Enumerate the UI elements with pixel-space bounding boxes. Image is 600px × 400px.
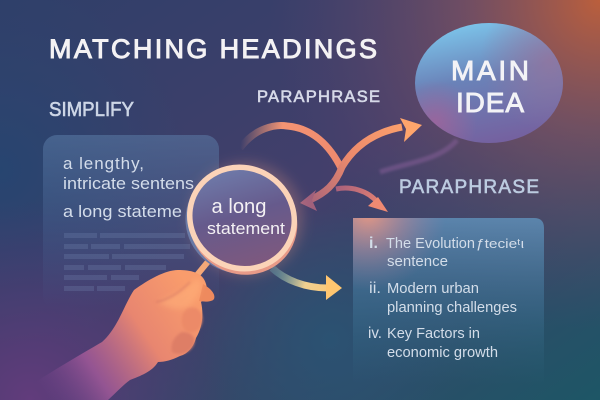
faint arrow trail from main idea xyxy=(380,140,457,172)
handle xyxy=(197,258,211,275)
main idea ellipse xyxy=(415,23,563,143)
list text: planning challenges xyxy=(387,299,517,316)
list text: economic growth xyxy=(387,344,498,361)
list text: Key Factors in xyxy=(387,325,480,342)
main idea label: IDEA xyxy=(456,87,524,118)
list text: The Evolution xyxy=(386,235,475,252)
source text lines: a lengthy, xyxy=(63,154,144,173)
heading: simplify: SIMPLIFY xyxy=(49,99,134,121)
placeholder text lines xyxy=(64,233,190,291)
lens body xyxy=(166,149,312,293)
palm crease xyxy=(156,282,190,302)
list text: ƒtecieᵗι xyxy=(476,236,524,251)
heading: paraphrase bottom: PARAPHRASE xyxy=(399,177,539,198)
list text: sentence xyxy=(387,253,448,270)
thumb highlight xyxy=(158,278,201,309)
curled fingers xyxy=(182,307,202,332)
source text lines: a long stateme xyxy=(63,202,182,221)
lens text: a long xyxy=(212,196,266,218)
list text: Modern urban xyxy=(387,280,479,297)
arrow: lens to list panel xyxy=(272,268,342,300)
title: MATCHING HEADINGS xyxy=(49,34,377,64)
lens text xyxy=(207,196,285,238)
lens ring xyxy=(171,148,313,288)
list text: i. xyxy=(369,235,378,252)
source text lines: intricate sentens xyxy=(63,174,194,193)
list text: iv. xyxy=(368,325,382,342)
panel: source text xyxy=(43,135,219,310)
panel: headings list xyxy=(353,218,544,385)
arrow: up to main idea and back to lens xyxy=(300,118,422,211)
magnifier xyxy=(166,148,317,295)
arrow: curved from lens over the top xyxy=(240,126,342,170)
arrow: to list panel xyxy=(336,188,388,212)
lens glow xyxy=(189,162,303,276)
source text lines xyxy=(63,154,194,221)
main idea label: MAIN xyxy=(451,55,529,86)
index finger xyxy=(199,284,214,302)
main idea label xyxy=(451,55,529,118)
heading: paraphrase top: PARAPHRASE xyxy=(257,88,380,106)
list text xyxy=(368,235,524,361)
list text: ii. xyxy=(369,280,381,297)
lens text: statement xyxy=(207,219,285,238)
hand xyxy=(20,270,214,400)
